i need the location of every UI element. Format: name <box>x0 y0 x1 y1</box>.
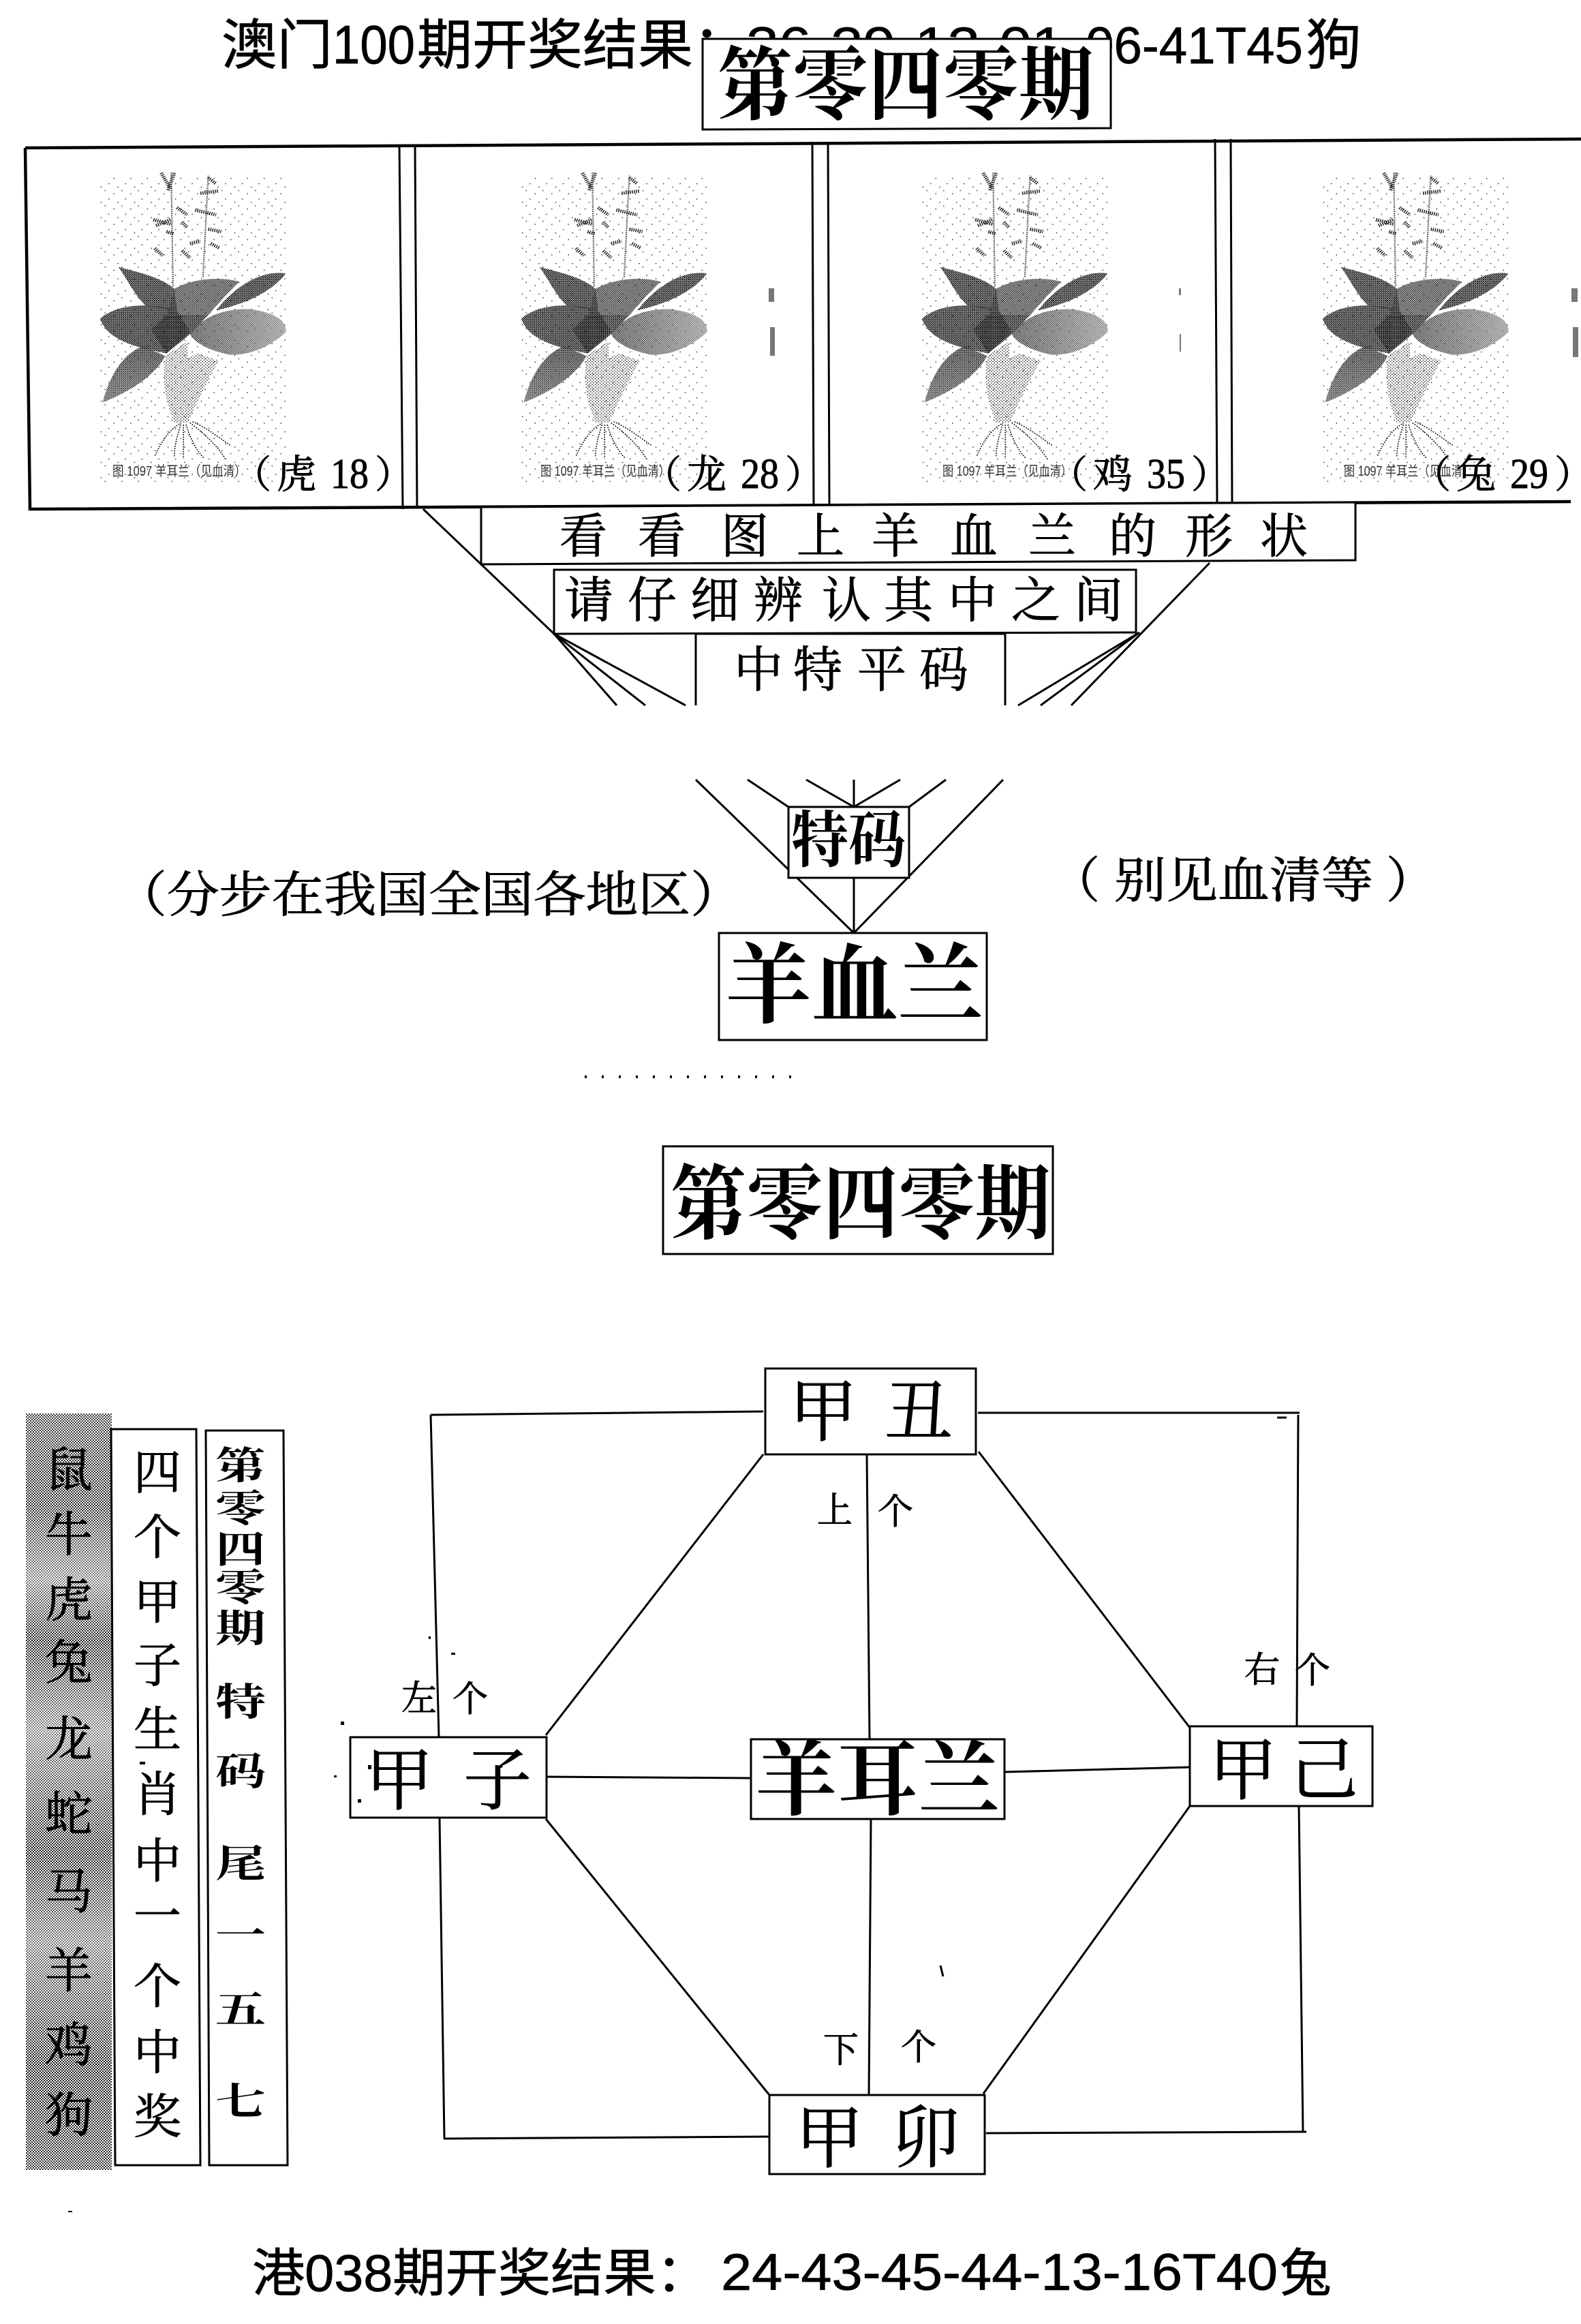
box: jia chou: 甲 <box>789 1375 857 1450</box>
funnel lines lower <box>696 780 1003 933</box>
plant captions: 图 1097 羊耳兰（见血清） <box>942 463 1072 479</box>
panel: four jiazi zodiac note <box>111 1429 200 2165</box>
panel: four jiazi zodiac note: 个 <box>134 1512 181 1565</box>
direction labels: 下 <box>823 2032 859 2070</box>
label tiger 18 <box>233 451 413 498</box>
plant captions: 图 1097 羊耳兰（见血清） <box>1344 463 1473 479</box>
box: jia zi <box>350 1737 547 1819</box>
box: jia ji <box>1190 1726 1372 1809</box>
label dragon 28 <box>643 451 823 498</box>
special code box: 特码 <box>791 808 906 875</box>
leaf fragments at panel edges <box>769 288 1578 357</box>
issue title box lower: 第零四零期 <box>671 1159 1051 1250</box>
panel: zodiac column: 龙 <box>45 1714 93 1767</box>
panel: special code tail note: 零 <box>215 1488 266 1531</box>
plant name box: 羊血兰 <box>726 938 983 1035</box>
box: jia mao: 卯 <box>891 2101 960 2177</box>
panel: four jiazi zodiac note: 子 <box>134 1640 181 1693</box>
plant picture 3 <box>922 172 1108 483</box>
cropped text remnant <box>585 1075 806 1078</box>
panel: zodiac column: 兔 <box>45 1638 93 1690</box>
panel: zodiac column <box>26 1413 112 2170</box>
label rabbit 29: 兔 <box>1456 453 1496 497</box>
plant captions: 图 1097 羊耳兰（见血清） <box>112 463 246 479</box>
panel: special code tail note: 零 <box>215 1568 266 1610</box>
label rabbit 29: （ <box>1413 455 1451 497</box>
label dragon 28: 28 <box>741 451 779 498</box>
direction labels: 个 <box>1295 1652 1330 1691</box>
bottom result heading: 港038期开奖结果： <box>252 2245 709 2303</box>
panel: special code tail note: 期 <box>215 1608 266 1651</box>
plant picture 1 <box>100 172 286 483</box>
plant captions <box>112 463 1473 479</box>
direction labels <box>401 1492 1330 2070</box>
label tiger 18: （ <box>233 455 271 497</box>
label dragon 28: 龙 <box>687 453 726 497</box>
connector lines into special box <box>748 780 946 933</box>
panel: special code tail note: 七 <box>215 2081 266 2124</box>
note: also known as <box>1051 854 1435 908</box>
panel: plant pictures strip <box>25 139 1581 509</box>
panel: special code tail note: 特 <box>215 1682 266 1724</box>
panel: four jiazi zodiac note: 中 <box>134 2028 181 2080</box>
panel: special code tail note: 五 <box>215 1989 266 2032</box>
panel: special code tail note <box>206 1431 288 2165</box>
box: jia ji: 己 <box>1290 1733 1358 1809</box>
bottom result heading <box>252 2244 1332 2303</box>
scan specks <box>68 1636 455 2212</box>
panel: zodiac column: 蛇 <box>45 1789 93 1841</box>
instruction box: special and regular numbers <box>696 634 1005 705</box>
issue title box top: 第零四零期 <box>718 42 1094 131</box>
box: jia mao: 甲 <box>795 2101 863 2177</box>
direction labels: 个 <box>901 2029 936 2068</box>
panel: zodiac column: 虎 <box>45 1575 93 1627</box>
panel: special code tail note: 尾 <box>215 1844 266 1886</box>
bottom result heading: 24-43-45-44-13-16T40 <box>721 2244 1278 2302</box>
direction labels: 左 <box>401 1680 437 1719</box>
note: also known as: （ <box>1051 854 1100 908</box>
direction labels: 上 <box>817 1492 853 1531</box>
note: distribution: （分步在我国全国各地区） <box>114 868 743 923</box>
instruction box: look at the plant shape: 看看图上羊血兰的形状 <box>559 511 1308 564</box>
panel: zodiac column: 牛 <box>45 1510 93 1562</box>
box: jia zi: 甲 <box>365 1743 433 1819</box>
instruction box: special and regular numbers: 中特平码 <box>734 643 968 698</box>
direction labels: 个 <box>878 1493 913 1532</box>
panel: special code tail note: 四 <box>215 1529 266 1572</box>
label dragon 28: ） <box>785 455 823 497</box>
diagram connector lines <box>431 1411 1306 2139</box>
box: plant name centre: 羊耳兰 <box>756 1735 1000 1826</box>
note: also known as: ） <box>1386 854 1435 908</box>
box: jia chou <box>765 1369 976 1454</box>
panel: four jiazi zodiac note: 肖 <box>134 1769 181 1822</box>
note: also known as: 别见血清等 <box>1114 854 1373 908</box>
funnel connector lines <box>423 509 1210 705</box>
top result heading: 100 <box>333 14 415 75</box>
box: jia ji: 甲 <box>1209 1733 1277 1809</box>
panel: zodiac column: 鼠 <box>45 1445 93 1497</box>
label tiger 18: ） <box>375 455 413 497</box>
label rabbit 29: 29 <box>1510 451 1548 498</box>
plant captions: 图 1097 羊耳兰（见血清） <box>540 463 670 479</box>
label rabbit 29 <box>1413 451 1581 498</box>
bottom result heading: 兔 <box>1280 2245 1332 2303</box>
panel: special code tail note: 第 <box>215 1446 266 1488</box>
label rooster 35: （ <box>1049 455 1088 497</box>
box: jia chou: 丑 <box>885 1375 953 1450</box>
panel: zodiac column: 狗 <box>45 2090 93 2143</box>
label rooster 35 <box>1049 451 1229 498</box>
label tiger 18: 虎 <box>277 453 316 497</box>
top result heading: 期开奖结果： <box>417 15 748 76</box>
panel: four jiazi zodiac note: 奖 <box>134 2092 181 2144</box>
label tiger 18: 18 <box>331 451 369 498</box>
direction labels: 右 <box>1244 1651 1280 1690</box>
top result heading <box>221 14 1362 76</box>
top result heading: 狗 <box>1306 15 1362 76</box>
plant picture 2 <box>521 172 707 483</box>
panel: zodiac column: 鸡 <box>45 2020 93 2073</box>
box: jia zi: 子 <box>463 1743 532 1819</box>
panel: four jiazi zodiac note: 一 <box>134 1891 181 1944</box>
panel: four jiazi zodiac note: 四 <box>134 1448 181 1500</box>
label rooster 35: ） <box>1191 455 1229 497</box>
top result heading: 36-29-12-01- <box>746 17 1084 75</box>
panel: four jiazi zodiac note: 个 <box>134 1961 181 2014</box>
panel: four jiazi zodiac note: 中 <box>134 1836 181 1889</box>
label dragon 28: （ <box>643 455 681 497</box>
label rooster 35: 35 <box>1147 451 1185 498</box>
panel: four jiazi zodiac note: 甲 <box>134 1577 181 1630</box>
panel: zodiac column: 羊 <box>45 1946 93 1998</box>
panel: zodiac column: 马 <box>45 1867 93 1919</box>
box: jia mao <box>769 2095 985 2177</box>
direction labels: 个 <box>452 1681 488 1719</box>
label rooster 35: 鸡 <box>1093 453 1133 497</box>
panel: special code tail note: 码 <box>215 1752 266 1794</box>
instruction box: distinguish carefully: 请仔细辨认其中之间 <box>564 574 1123 628</box>
top result heading: 澳门 <box>221 15 333 76</box>
panel: special code tail note: 一 <box>215 1915 266 1957</box>
panel: four jiazi zodiac note: 生 <box>134 1704 181 1757</box>
plant picture 4 <box>1323 172 1509 483</box>
top result heading: 06-41T45 <box>1086 17 1303 75</box>
